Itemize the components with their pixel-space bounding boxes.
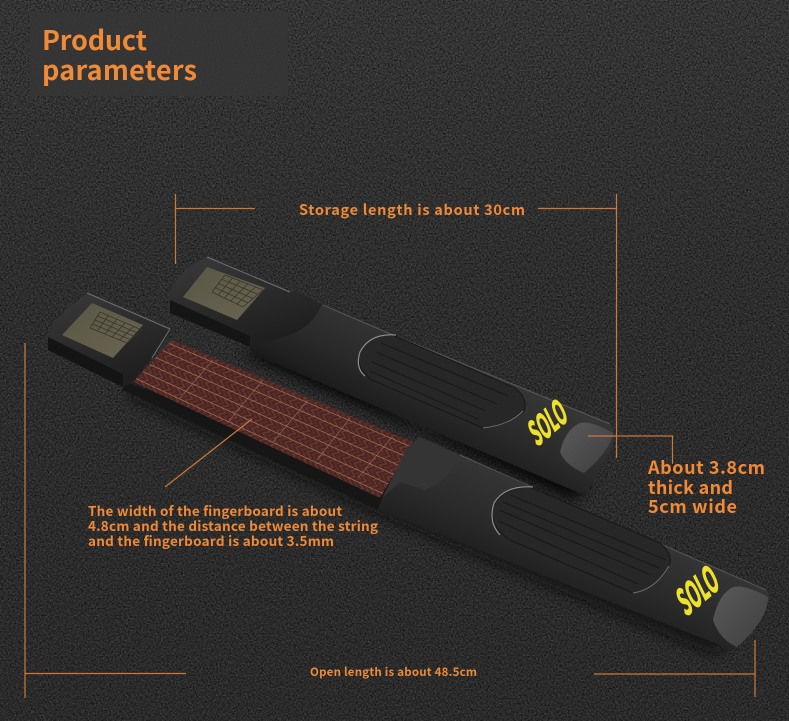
upper folded device bbox=[168, 257, 614, 500]
thickness callout leader bbox=[588, 436, 672, 464]
upper SOLO logo: SOLO bbox=[521, 386, 574, 456]
fingerboard callout text: 4.8cm and the distance between the string bbox=[88, 515, 378, 535]
upper grip panel bbox=[358, 335, 525, 428]
lower chord grid bbox=[90, 312, 142, 343]
thickness callout text: 5cm wide bbox=[648, 493, 737, 519]
fingerboard leader line bbox=[165, 419, 252, 487]
lower end pad bbox=[713, 586, 768, 647]
upper top highlight bbox=[323, 305, 610, 424]
lower device rail under fingerboard bbox=[123, 380, 380, 510]
lower screen bbox=[62, 303, 143, 358]
strings bbox=[136, 343, 410, 494]
upper device head with screen bbox=[168, 257, 322, 347]
lower device body bbox=[378, 437, 769, 648]
lower sleeve step bbox=[382, 437, 460, 498]
thickness callout text: thick and bbox=[648, 474, 733, 500]
fingerboard bbox=[133, 340, 413, 498]
storage length dimension line bbox=[175, 194, 616, 458]
open length label: Open length is about 48.5cm bbox=[310, 664, 477, 680]
lower device head with screen bbox=[47, 293, 171, 387]
upper device body bbox=[250, 289, 614, 493]
open length dimension lines bbox=[25, 343, 755, 698]
title text: Product bbox=[42, 19, 147, 58]
title text: parameters bbox=[42, 49, 197, 88]
title panel bbox=[30, 12, 288, 96]
upper screen bbox=[183, 267, 265, 320]
upper end pad bbox=[560, 422, 613, 473]
thickness callout text bbox=[647, 454, 765, 519]
frets bbox=[180, 360, 392, 478]
fingerboard callout text: The width of the fingerboard is about bbox=[88, 500, 342, 520]
thickness callout text: About 3.8cm bbox=[647, 454, 765, 480]
lower grip panel bbox=[492, 487, 670, 593]
lower SOLO logo: SOLO bbox=[668, 550, 726, 627]
storage length label: Storage length is about 30cm bbox=[299, 199, 525, 220]
title text bbox=[42, 19, 197, 88]
fingerboard callout text: and the fingerboard is about 3.5mm bbox=[88, 530, 334, 550]
fingerboard callout text bbox=[88, 500, 378, 550]
lower top highlight bbox=[460, 455, 766, 590]
upper chord grid bbox=[212, 275, 263, 307]
lower open device bbox=[47, 293, 769, 655]
